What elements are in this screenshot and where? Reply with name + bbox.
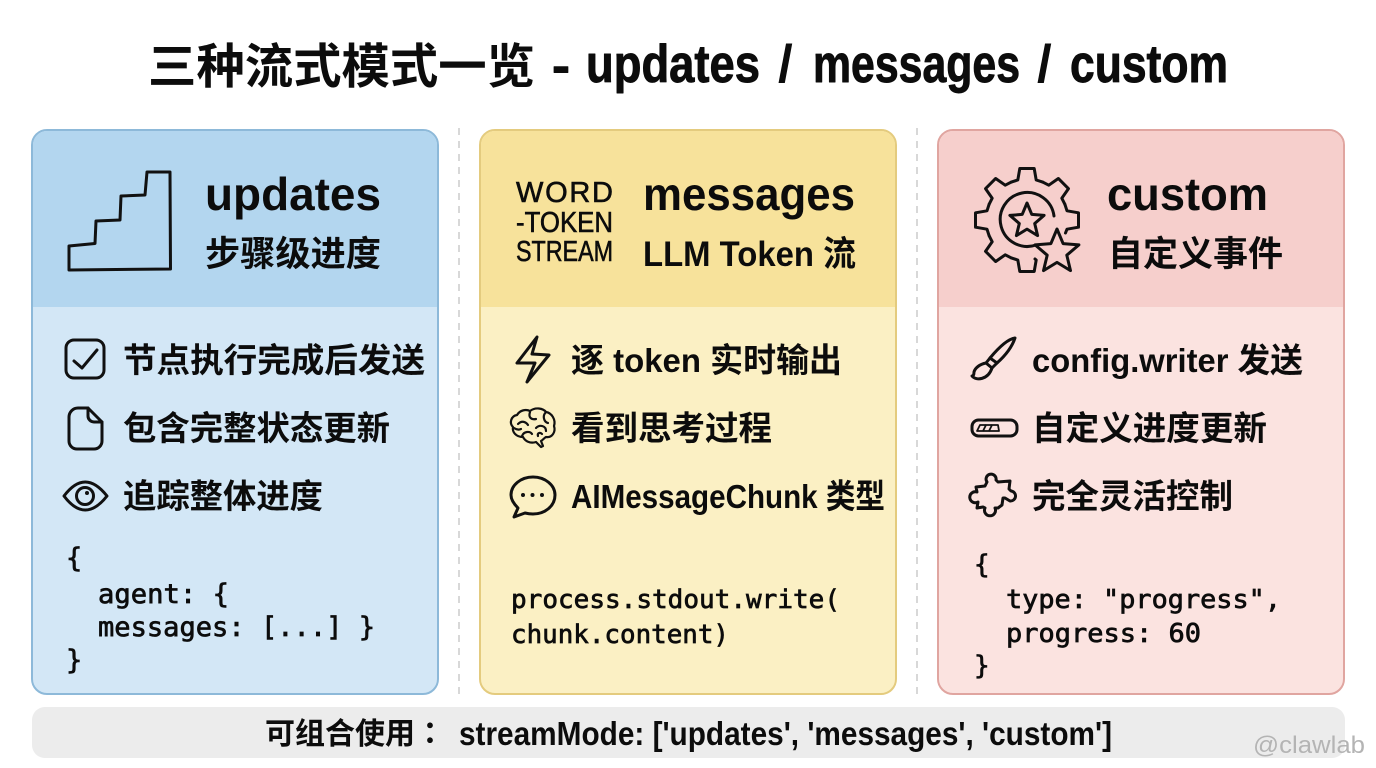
code: updates: } [66, 645, 82, 676]
panel: custom [938, 130, 1344, 694]
title: custom [1070, 35, 1228, 94]
panel body: messages [480, 130, 896, 694]
subheading: updates: 步骤级进度 [205, 235, 381, 274]
icon: chat bubble [511, 477, 555, 517]
title [148, 35, 1228, 94]
code: custom: { [974, 550, 990, 580]
text: item 2: 自定义进度更新 [1032, 411, 1267, 448]
panel: updates [32, 130, 438, 694]
code: updates: { [66, 543, 82, 574]
icon: brain [511, 408, 555, 447]
icon: word token stream: STREAM [516, 236, 613, 268]
icon: stairs [69, 172, 170, 270]
icon: gear with stars [976, 168, 1079, 272]
footer bar: ： [415, 709, 445, 753]
title: - [552, 40, 570, 93]
icon: document [69, 408, 102, 449]
subheading: custom: 自定义事件 [1108, 235, 1283, 274]
footer bar: streamMode: ['updates', 'messages', 'custom'] [459, 715, 1112, 752]
title: messages [813, 35, 1020, 94]
icon: word token stream: WORD [516, 177, 613, 209]
panel header: updates [33, 131, 437, 307]
title: updates [586, 35, 760, 94]
text: item 2: 看到思考过程 [571, 411, 772, 448]
panel header: messages [481, 131, 895, 307]
icon: puzzle piece [970, 474, 1016, 516]
text: item 1: 逐 token 实时输出 [571, 343, 842, 380]
code: custom [974, 550, 1281, 681]
icon: paint brush [972, 338, 1015, 379]
code: updates [66, 543, 375, 676]
panel body: updates [32, 130, 438, 694]
footer bar [32, 707, 1345, 758]
heading: messages: messages [643, 168, 855, 220]
panel: messages [480, 130, 896, 694]
code: updates: agent: { [98, 579, 229, 610]
panel body: custom [938, 130, 1344, 694]
icon: word token stream: -TOKEN [516, 207, 613, 239]
text: item 3: 完全灵活控制 [1032, 479, 1233, 516]
text: item 1: 节点执行完成后发送 [123, 343, 425, 380]
subheading: messages: LLM Token 流 [643, 235, 856, 274]
text: item 1: config.writer 发送 [1032, 343, 1303, 380]
icon: checkbox [66, 340, 104, 378]
panel header: custom [939, 131, 1343, 307]
code: messages [511, 585, 840, 650]
code: custom: type: "progress", [1006, 585, 1281, 615]
icon: word token stream [516, 177, 613, 268]
title: 三种流式模式一览 [148, 41, 535, 94]
watermark: @clawlab [1253, 732, 1365, 759]
code: updates: messages: [...] } [98, 612, 375, 643]
heading: updates: updates [205, 168, 381, 220]
code: messages: process.stdout.write( [511, 585, 840, 615]
icon: lightning [517, 337, 549, 382]
title: / [1037, 35, 1052, 94]
footer bar: 可组合使用 [265, 718, 415, 751]
code: custom: progress: 60 [1006, 619, 1201, 649]
text: item 3: 追踪整体进度 [123, 479, 323, 516]
code: custom: } [974, 651, 990, 681]
icon: progress bar [972, 420, 1017, 436]
icon: eye [64, 482, 107, 510]
text: item 2: 包含完整状态更新 [123, 411, 390, 448]
text: item 3: AIMessageChunk 类型 [571, 479, 885, 516]
title: / [778, 35, 793, 94]
code: messages: chunk.content) [511, 620, 729, 650]
heading: custom: custom [1107, 168, 1268, 220]
